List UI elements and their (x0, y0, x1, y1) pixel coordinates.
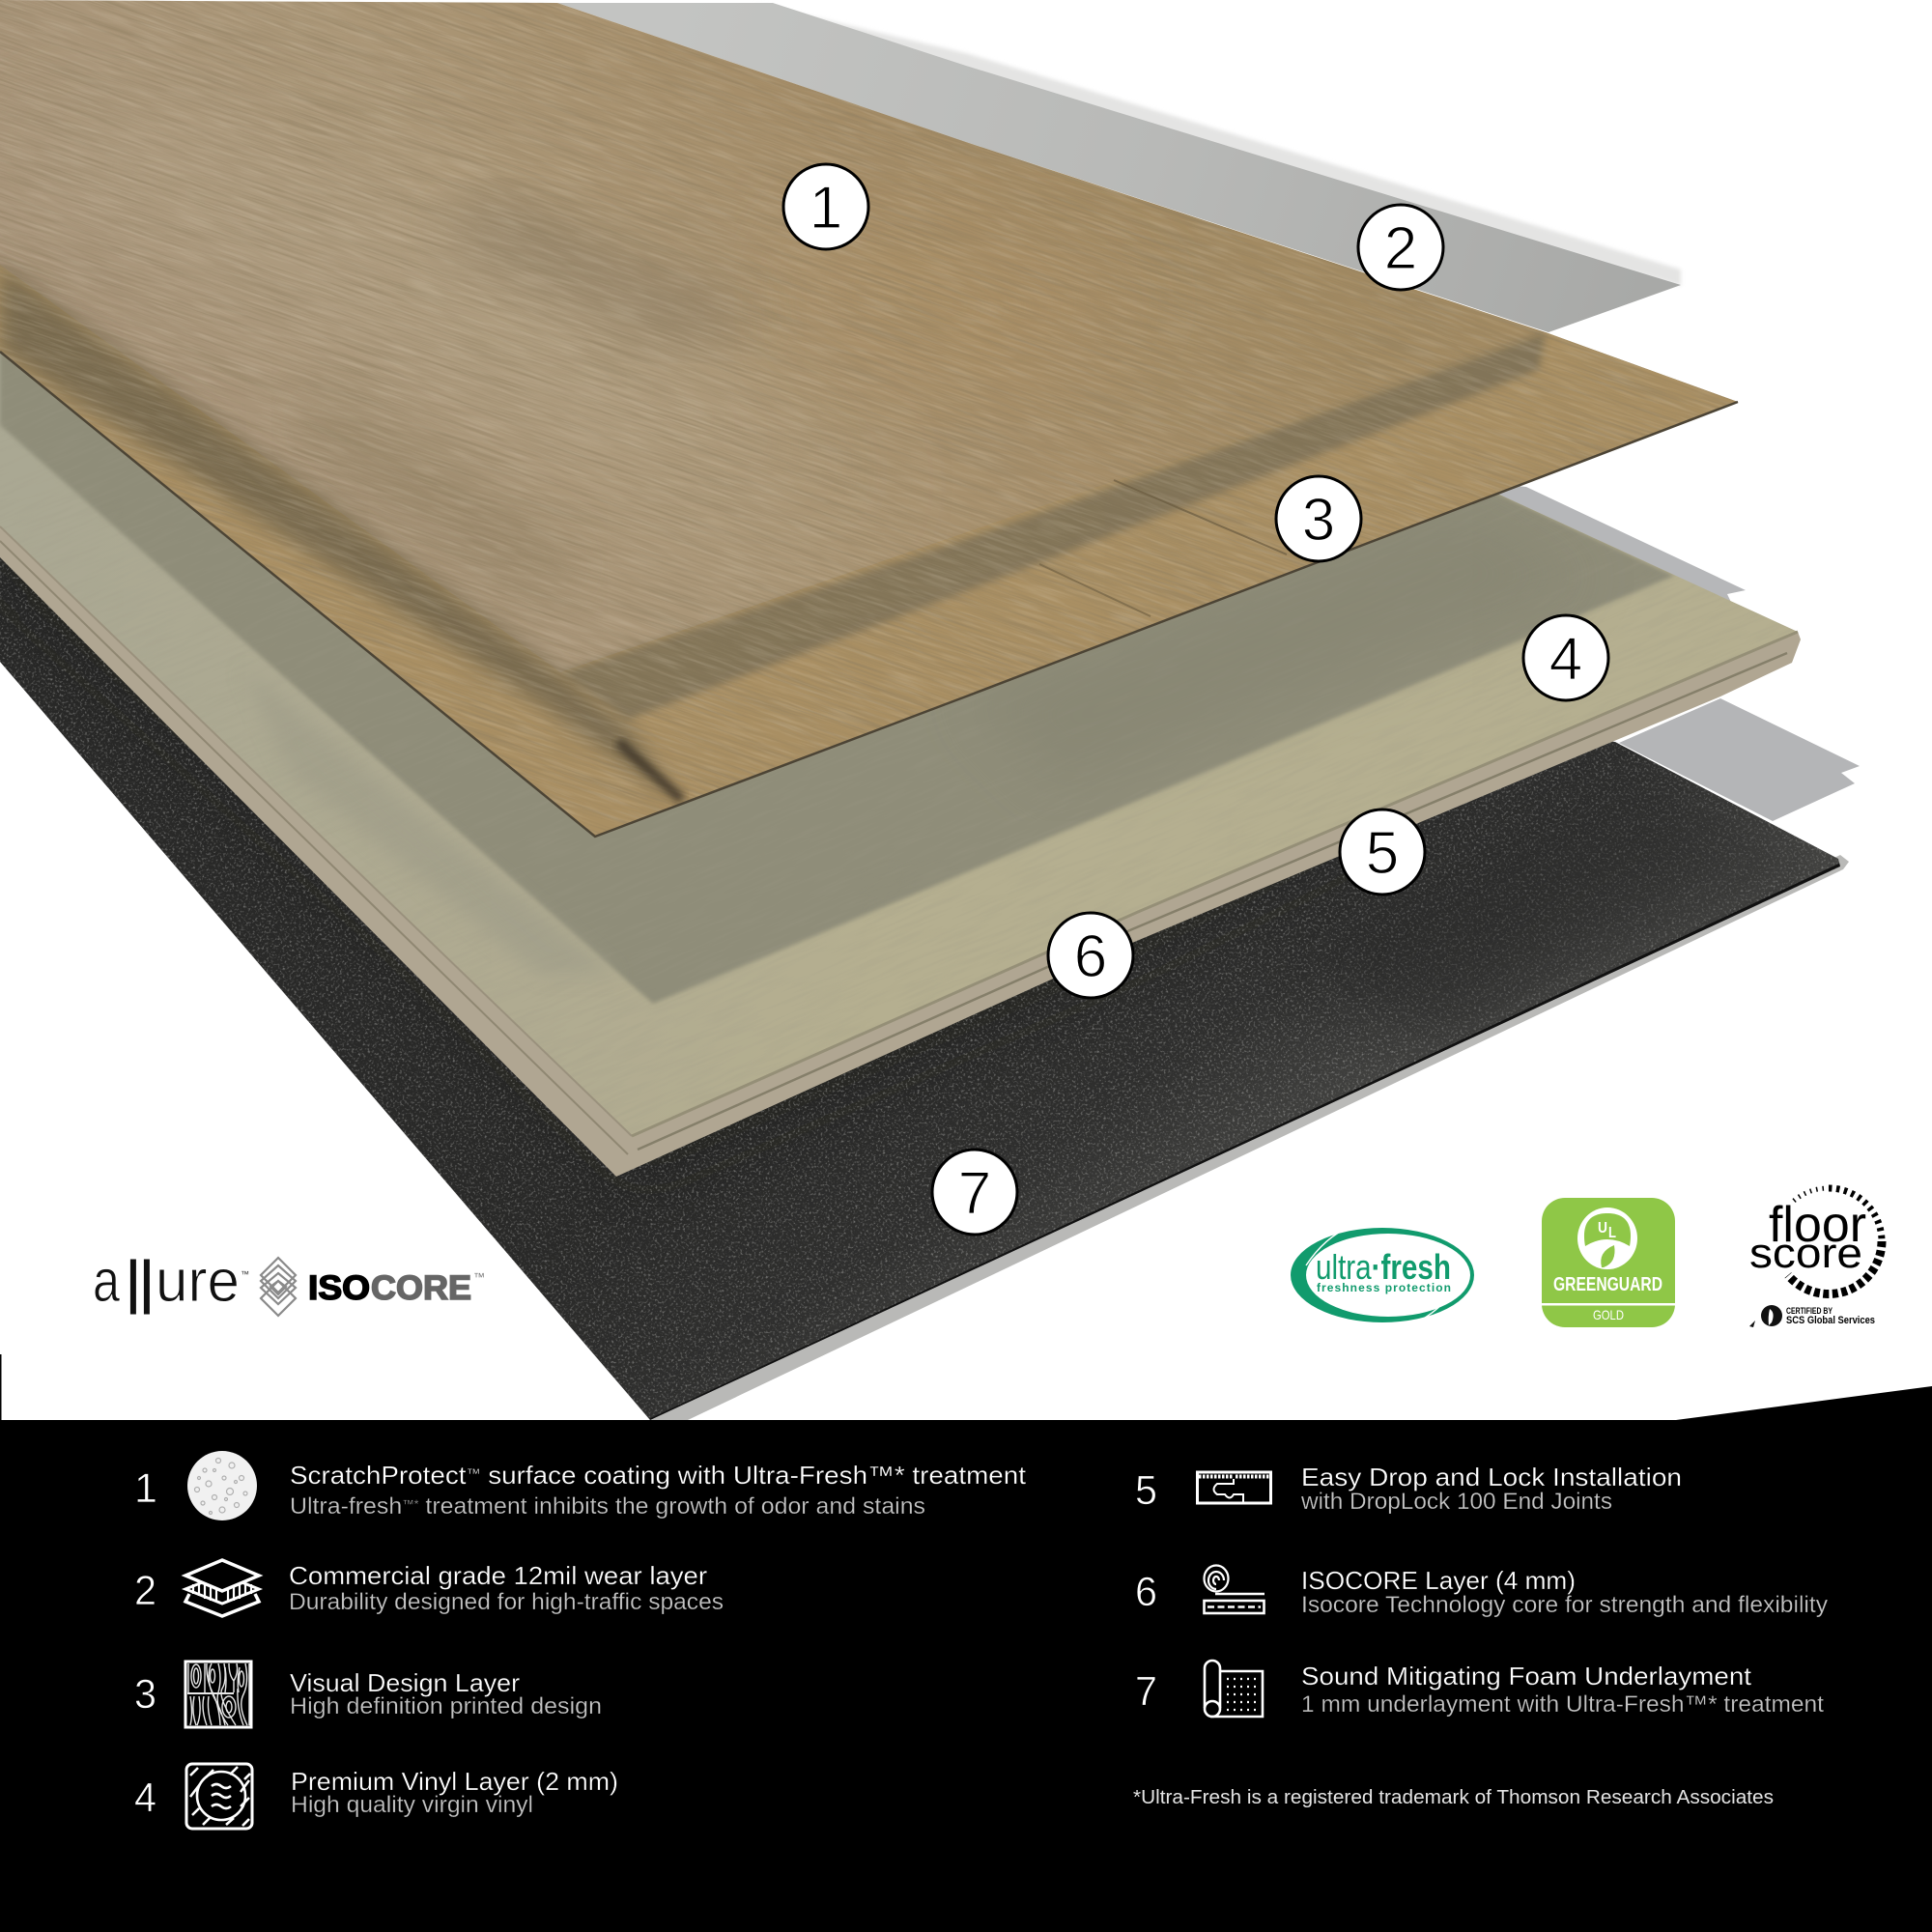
legend item 5: Easy Drop and Lock Installation (1301, 1463, 1682, 1492)
logo: ultra-fresh: ultra·fresh (1316, 1247, 1451, 1287)
legend item 1: 1 (134, 1465, 157, 1512)
logo: greenguard gold: GREENGUARD (1553, 1274, 1662, 1295)
icon: vinyl layer (186, 1764, 252, 1829)
logo: allure isocore: a (93, 1248, 120, 1315)
legend item 4: Premium Vinyl Layer (2 mm) (291, 1767, 618, 1796)
legend item 7: Sound Mitigating Foam Underlayment (1301, 1662, 1752, 1690)
legend item 1: ™* (402, 1497, 419, 1511)
legend item 3: Visual Design Layer (290, 1668, 520, 1697)
legend item 2: Commercial grade 12mil wear layer (289, 1561, 707, 1590)
dark knot streak (618, 742, 682, 800)
icon: SCS bird (1749, 1305, 1782, 1327)
layer 4 and 6: vinyl and isocore core (0, 354, 1801, 1177)
core side edge (0, 522, 1801, 1177)
legend item 4: 4 (134, 1775, 156, 1821)
logo: allure isocore: ure (156, 1248, 240, 1315)
legend item 1: Ultra-fresh (290, 1493, 398, 1520)
icon: wood grain (185, 1662, 251, 1727)
core darker inner band (0, 290, 1674, 1004)
core grooves (0, 526, 632, 1136)
wood edge line (0, 352, 1738, 837)
legend item 5 (1135, 1463, 1682, 1515)
logo: allure isocore: ll (125, 1245, 156, 1331)
legend item 5: with DropLock 100 End Joints (1300, 1489, 1612, 1515)
legend item 4 (134, 1764, 618, 1829)
footnote: *Ultra-Fresh is a registered trademark of Thomson Research Associates (1133, 1787, 1774, 1808)
logo: allure isocore: ™ (473, 1270, 485, 1284)
callout 7 (932, 1150, 1017, 1235)
callout 3: 3 (1302, 487, 1335, 554)
icon: isocore roll (1204, 1565, 1264, 1613)
logo: floorscore: CERTIFIED BY (1786, 1306, 1833, 1316)
legend item 2: Durability designed for high-traffic spaces (289, 1589, 724, 1615)
logo: allure isocore (93, 1245, 485, 1331)
legend item 7 (1135, 1661, 1824, 1718)
legend item 3: High definition printed design (290, 1693, 602, 1719)
layer 1 and 3: wood plank (0, 0, 1739, 838)
callout 4 (1523, 615, 1608, 700)
legend item 2: 2 (134, 1568, 156, 1614)
icon: dashed ring (1788, 1188, 1882, 1293)
icon: drop lock joint (1198, 1472, 1271, 1503)
icon: foam roll (1205, 1661, 1263, 1717)
logo: greenguard gold: GOLD (1593, 1307, 1624, 1322)
legend item 6: ISOCORE Layer (4 mm) (1301, 1566, 1576, 1595)
callout 3 (1276, 476, 1361, 561)
icon: wear layer stack (185, 1560, 259, 1616)
legend item 1 (134, 1451, 1027, 1520)
callout 1 (783, 164, 868, 249)
logo: floorscore: SCS Global Services (1786, 1315, 1875, 1326)
legend item 6: 6 (1135, 1569, 1157, 1615)
legend item 6: Isocore Technology core for strength and flexibility (1301, 1592, 1828, 1618)
logo: ultra-fresh: freshness protection (1317, 1281, 1451, 1294)
grain (0, 0, 1726, 831)
legend item 1: ScratchProtect (290, 1461, 455, 1490)
logo: floorscore (1749, 1188, 1882, 1327)
callout 6 (1048, 913, 1133, 998)
legend item 2 (134, 1560, 724, 1616)
callout 6: 6 (1074, 923, 1107, 990)
legend item 4: High quality virgin vinyl (291, 1792, 533, 1818)
logo: ultra-fresh (1291, 1227, 1474, 1323)
icon: droplet coating (187, 1451, 257, 1520)
layer: grey sheet behind core (1488, 483, 1746, 618)
dark plank seam band (0, 265, 1546, 802)
large wood tone patches (456, 193, 738, 347)
legend item 1: ™ (467, 1465, 480, 1481)
core surface (0, 290, 1798, 1136)
icon: UL leaf badge: U (1598, 1220, 1607, 1236)
callout 5: 5 (1366, 820, 1399, 887)
legend item 7: 7 (1135, 1668, 1157, 1715)
logo: floorscore: floor (1769, 1197, 1866, 1253)
callout 2 (1358, 205, 1443, 290)
legend panel (0, 1354, 1932, 1932)
legend item 5: 5 (1135, 1467, 1157, 1514)
logo: floorscore: score (1749, 1230, 1862, 1277)
legend item 1: surface coating with Ultra-Fresh™* treatment (480, 1461, 1027, 1490)
legend item 7: 1 mm underlayment with Ultra-Fresh™* treatment (1301, 1691, 1824, 1718)
callout 2: 2 (1384, 215, 1417, 282)
logo: allure isocore: ISO (308, 1269, 370, 1307)
layer: grey sheet behind foam (1619, 698, 1860, 821)
callout 4: 4 (1549, 626, 1582, 693)
icon: UL leaf badge: L (1608, 1225, 1616, 1241)
callout 5 (1340, 810, 1425, 895)
icon: isocore diamonds (261, 1258, 296, 1316)
lower plank (0, 265, 1738, 837)
logo: allure isocore: CORE (371, 1269, 471, 1307)
callout 1: 1 (810, 175, 842, 242)
foam shadow (650, 855, 1849, 1420)
icon: UL leaf badge (1577, 1208, 1637, 1269)
layer 2: wear layer (557, 3, 1681, 332)
callout 7: 7 (958, 1160, 991, 1227)
logo: allure isocore: ™ (241, 1269, 249, 1279)
legend item 3: 3 (134, 1671, 156, 1718)
legend item 6 (1135, 1565, 1828, 1618)
legend item 1: treatment inhibits the growth of odor and stains (419, 1493, 925, 1520)
logo: greenguard gold (1542, 1198, 1675, 1327)
legend item 3 (134, 1662, 602, 1727)
layer 7: foam underlayment (0, 557, 1849, 1420)
